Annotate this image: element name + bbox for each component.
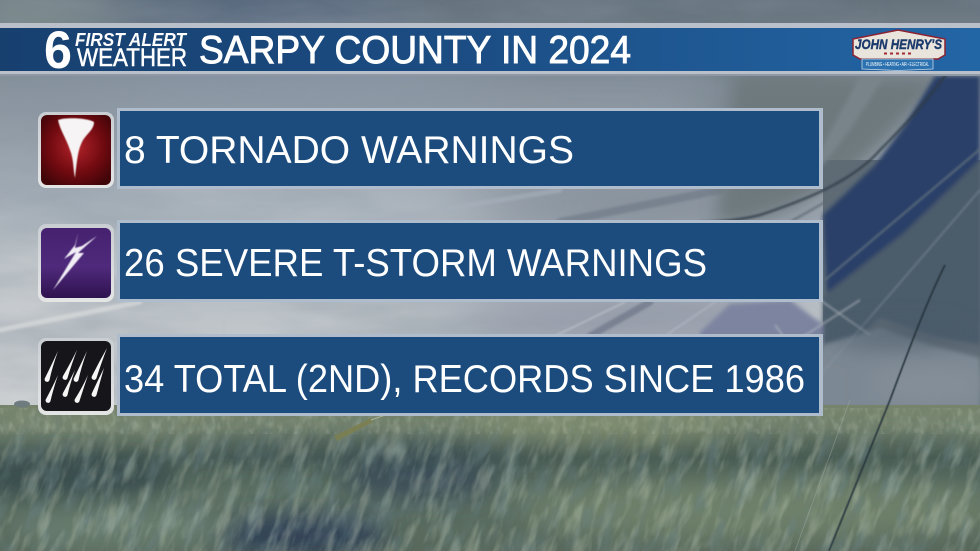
sponsor logo: John Henry's xyxy=(853,30,945,70)
logo: 6 First Alert Weather: WEATHER xyxy=(77,44,187,72)
icon: lightning bolt xyxy=(38,224,114,302)
diagonal streaks between panels xyxy=(0,188,850,336)
panel: total warnings xyxy=(117,334,823,416)
sponsor logo: John Henry's: PLUMBING • HEATING • AIR • ELECTRICAL xyxy=(866,62,929,68)
dark diagonal line over field xyxy=(829,265,945,551)
panel: tornado warnings: 8 TORNADO WARNINGS xyxy=(124,129,574,172)
logo: 6 First Alert Weather: FIRST ALERT xyxy=(75,30,188,50)
title: SARPY COUNTY IN 2024 xyxy=(199,29,631,72)
row 1: tornado warnings xyxy=(38,108,823,189)
streak across grass xyxy=(334,418,373,441)
row 3: total warnings xyxy=(38,334,823,416)
sponsor logo: John Henry's: JOHN HENRY'S xyxy=(855,36,943,52)
icon: tornado xyxy=(38,112,114,188)
logo: 6 First Alert Weather xyxy=(44,21,188,80)
icon: rain xyxy=(38,338,114,415)
panel: tornado warnings xyxy=(117,108,823,189)
row 2: severe t-storm warnings xyxy=(38,220,823,302)
storm funnel, right side xyxy=(700,76,980,408)
panel: severe t-storm warnings xyxy=(117,220,823,302)
grass field xyxy=(0,405,980,551)
header bar xyxy=(0,21,980,80)
logo: 6 First Alert Weather: 6 xyxy=(44,21,72,80)
panel: severe t-storm warnings: 26 SEVERE T-STORM WARNINGS xyxy=(124,242,707,285)
panel: total warnings: 34 TOTAL (2ND), RECORDS SINCE 1986 xyxy=(124,358,805,401)
